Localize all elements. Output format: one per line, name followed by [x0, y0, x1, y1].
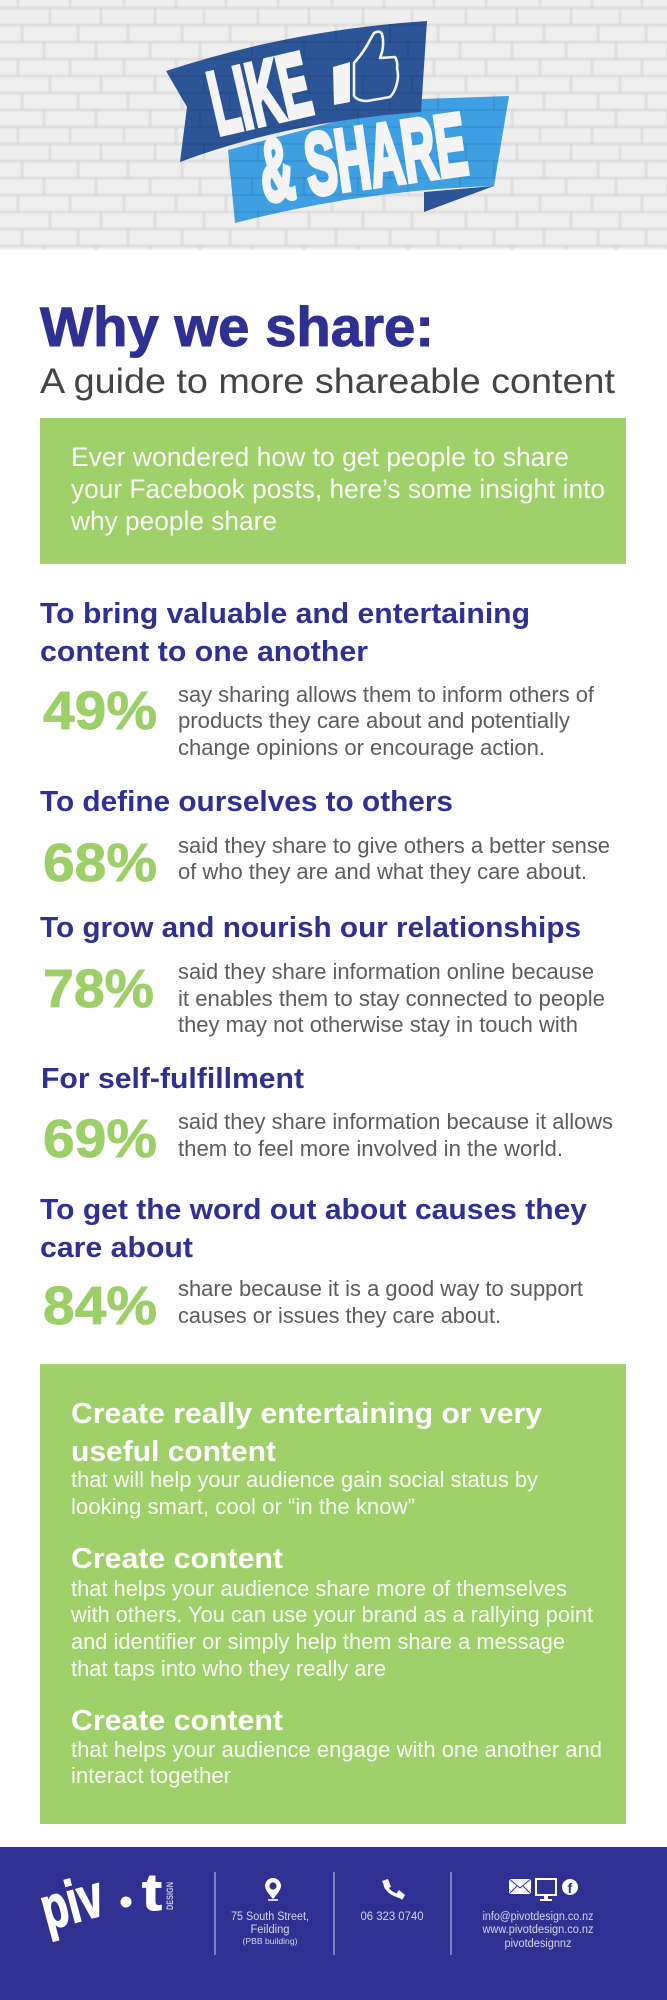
- banner: light blue share ribbon: [228, 96, 509, 223]
- contact: address: [231, 1878, 309, 1946]
- text block: of who they are and what they care about.: [178, 859, 587, 884]
- contact: address: (PBB building): [242, 1936, 298, 1946]
- section: causes: [40, 1194, 587, 1336]
- text block: change opinions or encourage action.: [178, 735, 545, 760]
- text: intro: your Facebook posts, here’s some insight into: [71, 474, 605, 504]
- recommendation: entertaining or useful: Create really entertaining or very: [71, 1398, 542, 1430]
- recommendation: share more of themselves: Create content: [71, 1543, 283, 1575]
- text: intro: Ever wondered how to get people to share: [71, 442, 569, 472]
- heading: [40, 598, 530, 668]
- stat: 78%: 78%: [43, 959, 154, 1019]
- text: and share: & SHARE: [253, 94, 473, 221]
- icon: facebook: f: [568, 1880, 572, 1896]
- logo: pivot design: t: [142, 1864, 162, 1922]
- stat: 68%: 68%: [43, 833, 157, 893]
- text: LIKE: LIKE: [200, 35, 320, 154]
- stat: 49%: 49%: [43, 681, 157, 741]
- icon: envelope: [509, 1879, 531, 1894]
- text block: it enables them to stay connected to people: [178, 986, 605, 1011]
- recommendation: engage with one another: that helps your audience engage with one another and: [71, 1737, 602, 1762]
- heading: care about: [40, 1232, 193, 1264]
- heading: [40, 1194, 587, 1264]
- section: define ourselves: [40, 786, 610, 893]
- subtitle: A guide to more shareable content: [40, 362, 615, 401]
- recommendation: engage with one another: interact together: [71, 1763, 231, 1788]
- text block: [178, 1109, 613, 1161]
- recommendation: entertaining or useful: that will help your audience gain social status by: [71, 1467, 538, 1492]
- stat: 69%: 69%: [43, 1109, 157, 1169]
- text block: say sharing allows them to inform others of: [178, 682, 595, 707]
- panel: intro callout: [40, 418, 626, 564]
- text block: [178, 833, 610, 884]
- icon: map pin: [265, 1878, 281, 1900]
- heading: To grow and nourish our relationships: [40, 912, 581, 944]
- text block: said they share information because it allows: [178, 1109, 613, 1134]
- text block: [178, 959, 605, 1037]
- panel: recommendations: [40, 1364, 626, 1824]
- text block: causes or issues they care about.: [178, 1303, 501, 1328]
- recommendation: entertaining or useful: useful content: [71, 1436, 276, 1468]
- recommendation: share more of themselves: [70, 1543, 593, 1681]
- text: intro: why people share: [70, 506, 277, 536]
- text block: [178, 1276, 583, 1328]
- text block: they may not otherwise stay in touch with: [178, 1012, 578, 1037]
- text block: share because it is a good way to support: [178, 1276, 583, 1301]
- heading: For self-fulfillment: [41, 1063, 304, 1095]
- section: self-fulfillment: [41, 1063, 613, 1169]
- recommendation: share more of themselves: with others. You can use your brand as a rallying point: [70, 1602, 593, 1627]
- stat: 84%: 84%: [43, 1276, 157, 1336]
- heading: To define ourselves to others: [40, 786, 453, 818]
- text block: them to feel more involved in the world.: [178, 1136, 563, 1161]
- contact: online: pivotdesignnz: [504, 1938, 572, 1950]
- logo: pivot design: piv: [33, 1862, 111, 1943]
- recommendation: entertaining or useful: [71, 1398, 542, 1519]
- contact: online: [482, 1879, 594, 1950]
- icon: monitor: [536, 1879, 556, 1901]
- text block: [178, 682, 595, 760]
- banner: dark blue like ribbon: [166, 21, 427, 162]
- recommendation: share more of themselves: and identifier or simply help them share a message: [71, 1629, 565, 1654]
- text block: said they share to give others a better sense: [178, 833, 610, 858]
- contact: phone: 06 323 0740: [360, 1911, 424, 1923]
- section: relationships: [40, 912, 605, 1037]
- contact: phone: [360, 1879, 424, 1923]
- panel: brick wall header: [0, 0, 667, 250]
- section: valuable content: [40, 598, 595, 760]
- title: Why we share:: [40, 295, 434, 358]
- logo: like and share banner: [166, 21, 509, 223]
- logo: pivot design: DESIGN: [165, 1882, 175, 1910]
- heading: To bring valuable and entertaining: [40, 598, 530, 630]
- text block: said they share information online because: [178, 959, 594, 984]
- icon: thumbs up: [333, 32, 398, 105]
- recommendation: engage with one another: Create content: [71, 1705, 283, 1737]
- text: intro: [70, 442, 605, 536]
- heading: To get the word out about causes they: [40, 1194, 587, 1226]
- logo: pivot design: [33, 1862, 175, 1943]
- contact: address: Feilding: [250, 1924, 290, 1936]
- contact: address: 75 South Street,: [231, 1911, 309, 1923]
- contact: online: info@pivotdesign.co.nz: [482, 1911, 594, 1923]
- banner: ribbon fold: [424, 186, 494, 212]
- recommendation: share more of themselves: that helps your audience share more of themselves: [71, 1576, 567, 1601]
- text block: products they care about and potentially: [178, 708, 570, 733]
- heading: content to one another: [40, 636, 368, 668]
- icon: telephone: [382, 1879, 405, 1900]
- contact: online: www.pivotdesign.co.nz: [482, 1924, 594, 1936]
- recommendation: share more of themselves: that taps into who they really are: [71, 1656, 386, 1681]
- recommendation: entertaining or useful: looking smart, cool or “in the know”: [71, 1494, 415, 1519]
- recommendation: engage with one another: [71, 1705, 602, 1788]
- panel: footer: [0, 1847, 667, 2000]
